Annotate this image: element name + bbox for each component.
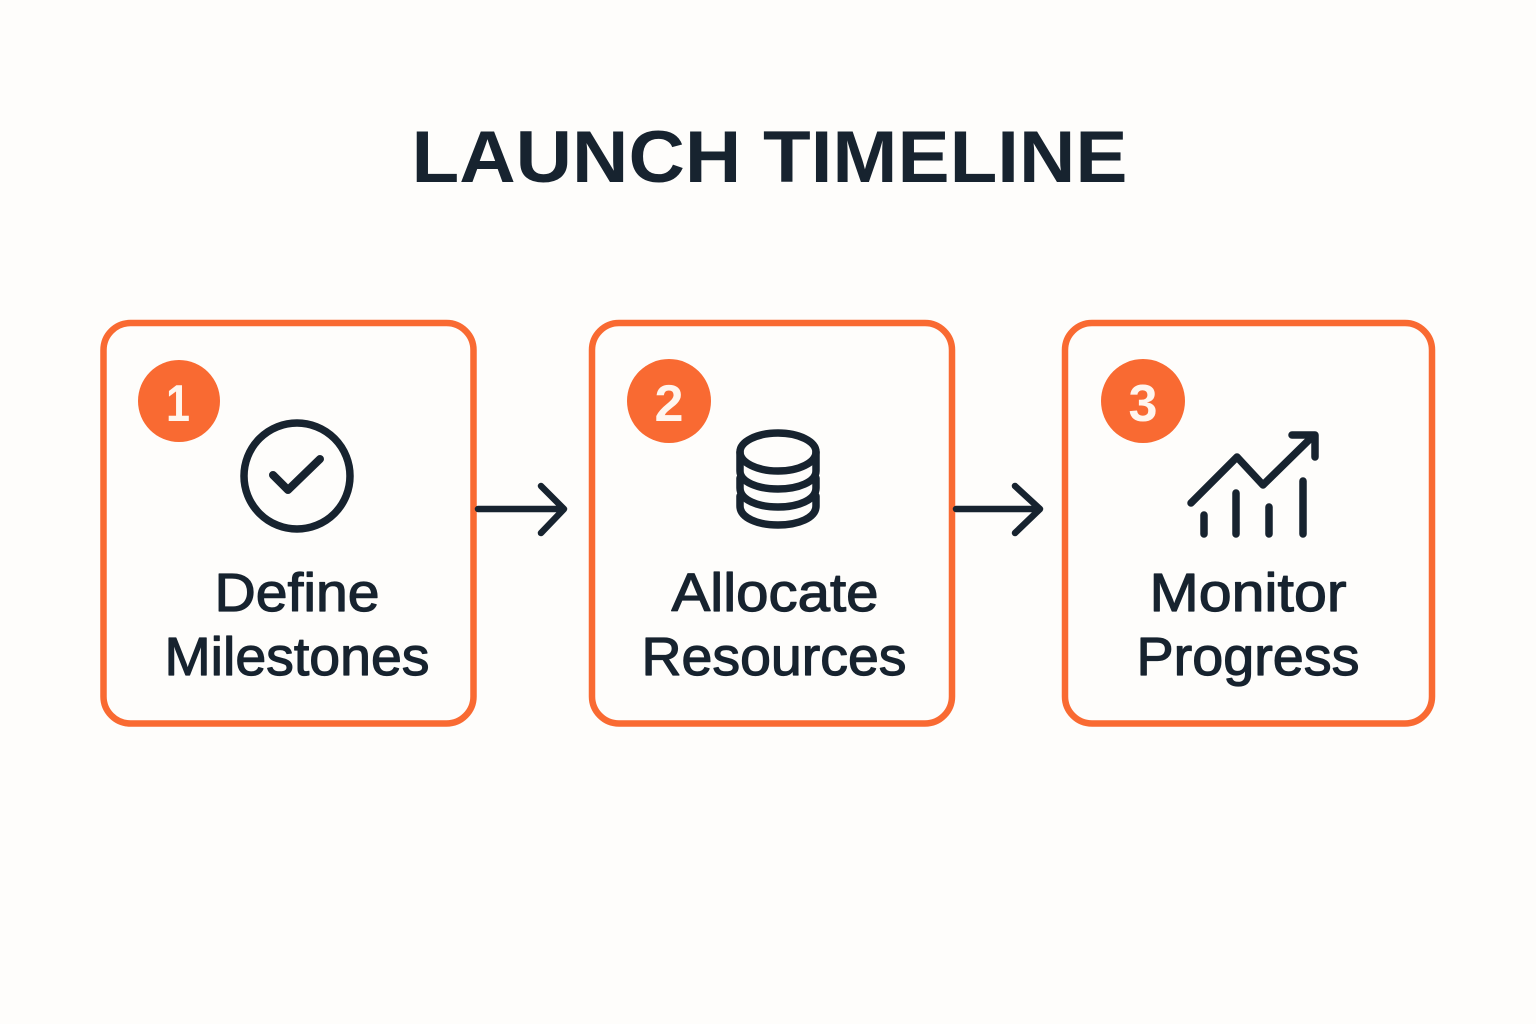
arrow 1 to 2 — [478, 486, 564, 533]
icon: check circle — [244, 423, 350, 529]
panel: define milestones — [104, 323, 474, 724]
label: define milestones: Define — [214, 563, 380, 623]
badge 2 — [627, 359, 711, 443]
badge 1 — [138, 360, 220, 442]
badge 1: 1 — [166, 375, 190, 433]
panel: allocate resources — [592, 323, 952, 724]
arrow 2 to 3 — [956, 486, 1040, 533]
badge 3: 3 — [1128, 375, 1158, 433]
icon: growth chart — [1191, 435, 1315, 534]
label: allocate resources: Allocate — [672, 563, 878, 623]
label: monitor progress: Progress — [1136, 627, 1360, 687]
label: define milestones: Milestones — [164, 627, 430, 687]
badge 2: 2 — [654, 375, 684, 433]
icon: database stack — [740, 433, 816, 525]
label: monitor progress: Monitor — [1150, 563, 1347, 623]
panel: monitor progress — [1065, 323, 1432, 724]
title: LAUNCH TIMELINE — [412, 117, 1128, 198]
label: allocate resources: Resources — [642, 627, 906, 687]
badge 3 — [1101, 359, 1185, 443]
